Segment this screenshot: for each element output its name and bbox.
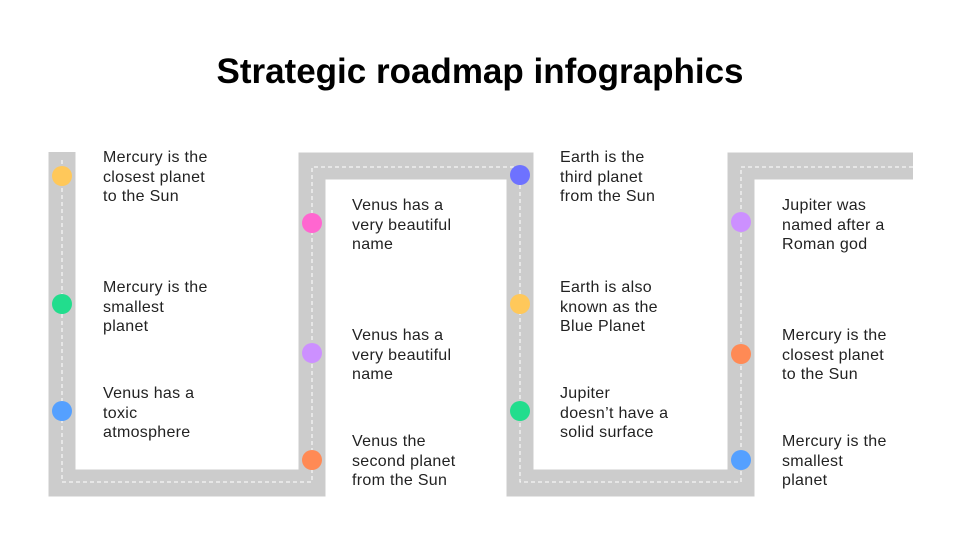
text: Venus has a (103, 385, 194, 402)
text: named after a (782, 216, 885, 234)
text: Jupiter was (782, 197, 866, 214)
text: Mercury is the (103, 279, 208, 296)
text blocks: to the Sun (103, 188, 179, 205)
text: second planet (352, 452, 456, 470)
text: closest planet (782, 346, 884, 364)
text blocks (103, 149, 208, 205)
text: third planet (560, 168, 643, 186)
text: Earth is also (560, 279, 652, 296)
text: atmosphere (103, 424, 190, 441)
dots (52, 165, 751, 470)
title: Strategic roadmap infographics (216, 52, 744, 91)
text: from the Sun (352, 472, 447, 489)
text: toxic (103, 404, 137, 422)
text: known as the (560, 298, 658, 316)
text: to the Sun (782, 366, 858, 383)
text: smallest (103, 298, 164, 316)
text: Mercury is the (782, 327, 887, 344)
text: Jupiter (560, 385, 610, 402)
text: planet (782, 472, 827, 489)
text: Blue Planet (560, 318, 645, 335)
text: Earth is the (560, 149, 645, 166)
text: very beautiful (352, 216, 451, 234)
text: Venus has a (352, 327, 443, 344)
text: doesn’t have a (560, 404, 668, 422)
text: name (352, 236, 393, 253)
text: from the Sun (560, 188, 655, 205)
text: solid surface (560, 424, 654, 441)
text blocks: closest planet (103, 168, 205, 186)
text: name (352, 366, 393, 383)
text: Roman god (782, 236, 867, 253)
text: Venus the (352, 433, 426, 450)
text: Venus has a (352, 197, 443, 214)
text: smallest (782, 452, 843, 470)
text blocks: Mercury is the (103, 149, 208, 166)
text: planet (103, 318, 148, 335)
text: very beautiful (352, 346, 451, 364)
text: Mercury is the (782, 433, 887, 450)
